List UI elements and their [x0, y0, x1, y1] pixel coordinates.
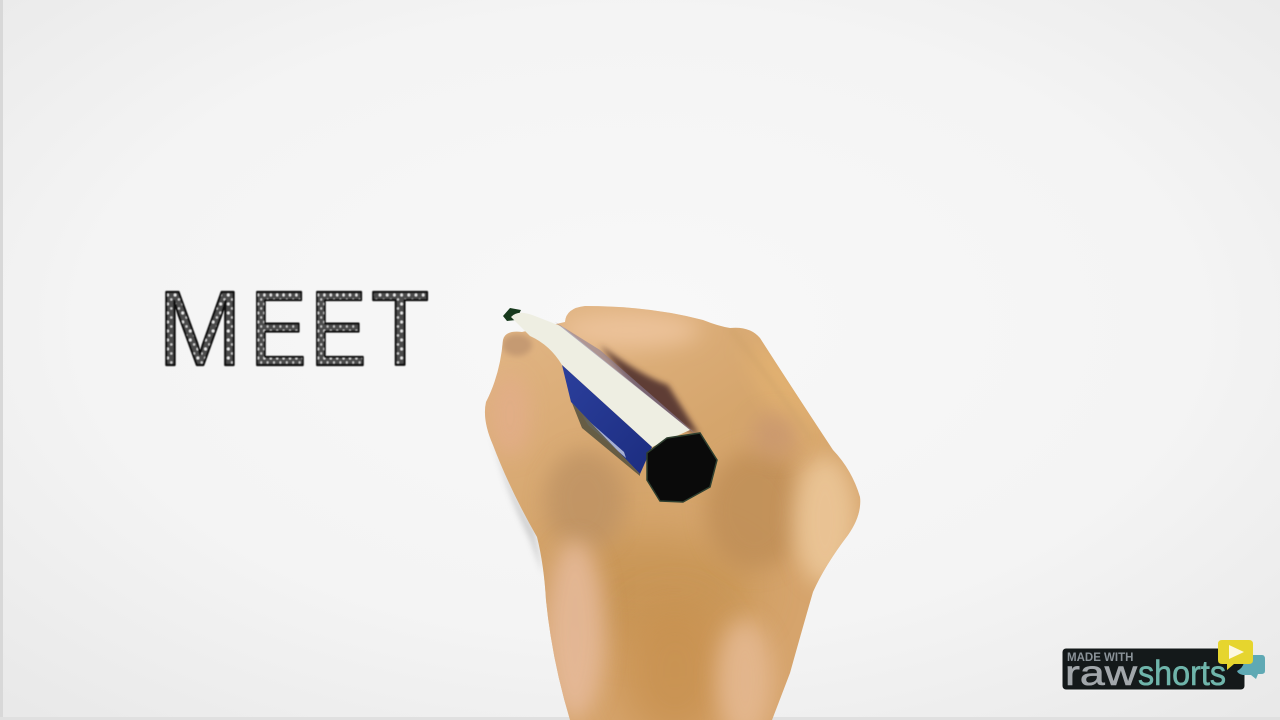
- marker barrel white: [511, 313, 690, 447]
- heading: MEET: T: [371, 270, 429, 388]
- heading: MEET: E: [250, 270, 307, 388]
- thumb nail: [502, 334, 532, 356]
- logo: made with rawshorts: [1062, 640, 1265, 693]
- heading: MEET: E: [310, 270, 367, 388]
- hand shadow: [490, 430, 543, 575]
- icon: yellow play bubble: [1218, 640, 1253, 670]
- logo: made with rawshorts: MADE WITH: [1067, 652, 1133, 664]
- heading: MEET: [158, 269, 429, 388]
- icon: teal speech bubble: [1237, 655, 1265, 679]
- gap between marker and fingers: [600, 345, 700, 436]
- heading: MEET: M: [158, 269, 242, 388]
- finger crease: [730, 328, 812, 440]
- marker tip: [503, 308, 521, 321]
- marker cap end: [647, 433, 717, 502]
- logo: made with rawshorts: raw: [1065, 654, 1138, 693]
- marker label blue: [562, 365, 652, 474]
- logo: made with rawshorts: shorts: [1138, 654, 1226, 693]
- illustration: hand holding marker: [470, 295, 870, 720]
- marker: [503, 308, 717, 502]
- hand: [470, 295, 870, 720]
